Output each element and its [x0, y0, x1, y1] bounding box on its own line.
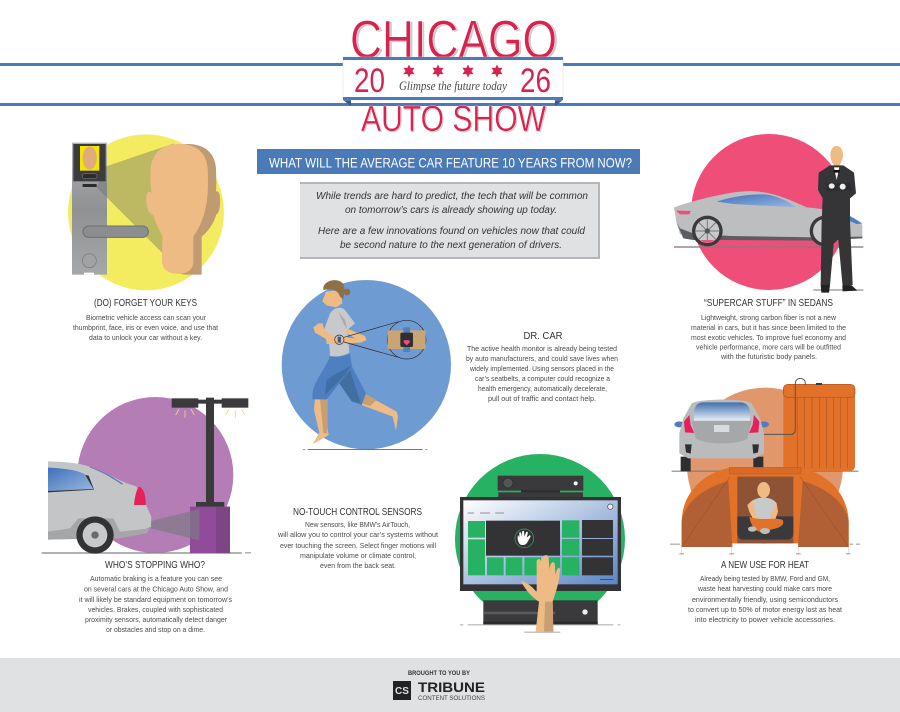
- body text: Automatic braking is a feature you can see: [90, 574, 222, 583]
- intro box: be second nature to the next generation of drivers.: [340, 240, 562, 251]
- tagline: Glimpse the future today: [399, 78, 507, 93]
- body text: ever touching the screen. Select finger motions will: [280, 541, 436, 550]
- question banner: WHAT WILL THE AVERAGE CAR FEATURE 10 YEARS FROM NOW?: [269, 154, 632, 170]
- heading: NO-TOUCH CONTROL SENSORS: [293, 506, 422, 518]
- heading: A NEW USE FOR HEAT: [721, 559, 809, 571]
- body text: vehicles. Brakes, coupled with sophisticated: [88, 605, 223, 614]
- body text: [466, 344, 618, 403]
- year 20: 20: [354, 62, 385, 100]
- illustration: car backing toward post: [42, 397, 251, 554]
- body text: pull out of traffic and contact help.: [488, 394, 596, 403]
- body text: to convert up to 50% of motor energy lost as heat: [688, 605, 843, 614]
- sponsor logo: CONTENT SOLUTIONS: [418, 695, 486, 702]
- header stripes: [0, 63, 900, 106]
- body text: into electricity to power vehicle accessories.: [695, 615, 835, 624]
- body text: or obstacles and stop on a dime.: [106, 625, 205, 634]
- illustration: supercar and man in tuxedo: [674, 134, 863, 293]
- heading: “SUPERCAR STUFF” IN SEDANS: [704, 297, 833, 309]
- body text: Biometric vehicle access can scan your: [86, 313, 206, 322]
- sponsor logo: [393, 679, 486, 702]
- heading: (DO) FORGET YOUR KEYS: [94, 297, 197, 309]
- body text: Lightweight, strong carbon fiber is not a new: [701, 313, 837, 322]
- body text: Already being tested by BMW, Ford and GM,: [700, 574, 830, 583]
- body text: car’s seatbelts, a computer could recognize a: [475, 374, 611, 383]
- body text: even from the back seat.: [320, 561, 396, 570]
- heading: DR. CAR: [524, 330, 563, 342]
- body text: [79, 574, 232, 634]
- stars: [403, 64, 503, 78]
- illustration: gesture screen and hand: [455, 454, 625, 633]
- title: Chicago: CHICAGO: [352, 11, 559, 71]
- body text: The active health monitor is already being tested: [467, 344, 617, 353]
- body text: by auto manufacturers, and could save lives when: [466, 354, 618, 363]
- panel: dr. car: [282, 280, 618, 450]
- heading: WHO’S STOPPING WHO?: [105, 559, 205, 571]
- body text: material in cars, but it has since been limited to the: [691, 323, 846, 332]
- body text: manipulate volume or climate control,: [300, 551, 416, 560]
- body text: New sensors, like BMW’s AirTouch,: [305, 520, 410, 529]
- body text: data to unlock your car without a key.: [89, 333, 202, 342]
- panel: a new use for heat: [670, 378, 860, 624]
- body text: health emergency, automatically decelerate,: [478, 384, 607, 393]
- footer: [0, 658, 900, 712]
- sponsor logo: CS: [395, 686, 409, 697]
- panel: who's stopping who: [42, 397, 251, 634]
- sponsor credit: BROUGHT TO YOU BY: [408, 671, 470, 677]
- body text: [73, 313, 219, 342]
- intro box: [300, 182, 600, 259]
- body text: [691, 313, 846, 361]
- intro box: While trends are hard to predict, the tech that will be common: [316, 191, 588, 202]
- body text: proximity sensors, automatically detect danger: [85, 615, 227, 624]
- panel: forget your keys: [68, 134, 224, 342]
- body text: thumbprint, face, iris or even voice, and use that: [73, 323, 219, 332]
- illustration: car, radiator, heated tent: [670, 378, 860, 554]
- intro box: Here are a few innovations found on vehicles now that could: [318, 226, 586, 237]
- illustration: runner with health monitor: [282, 280, 451, 450]
- panel: supercar stuff: [674, 134, 863, 361]
- body text: waste heat harvesting could make cars more: [697, 584, 832, 593]
- title: Auto Show: AUTO SHOW: [361, 98, 546, 139]
- body text: with the futuristic body panels.: [720, 352, 817, 361]
- body text: [277, 520, 439, 570]
- panel: no-touch control sensors: [277, 454, 625, 633]
- title: Chicago: CHICAGO: [350, 10, 557, 70]
- body text: environmentally friendly, using semiconductors: [692, 595, 838, 604]
- question banner: [257, 149, 640, 174]
- body text: [688, 574, 843, 624]
- ribbon: [343, 57, 563, 106]
- title: Auto Show: AUTO SHOW: [362, 99, 547, 140]
- body text: widely implemented. Using sensors placed in the: [469, 364, 614, 373]
- sponsor logo: TRIBUNE: [418, 679, 485, 695]
- illustration: face scanner lock: [68, 134, 224, 290]
- body text: will allow you to control your car’s systems without: [277, 530, 439, 539]
- year 26: 26: [520, 62, 551, 100]
- header logo: [0, 10, 900, 140]
- body text: it will likely be standard equipment on tomorrow’s: [79, 595, 232, 604]
- body text: on several cars at the Chicago Auto Show, and: [84, 584, 228, 594]
- body text: vehicle performance, more cars will be outfitted: [696, 342, 841, 352]
- intro box: on tomorrow’s cars is already showing up today.: [345, 205, 557, 216]
- body text: most exotic vehicles. To improve fuel economy and: [691, 333, 846, 342]
